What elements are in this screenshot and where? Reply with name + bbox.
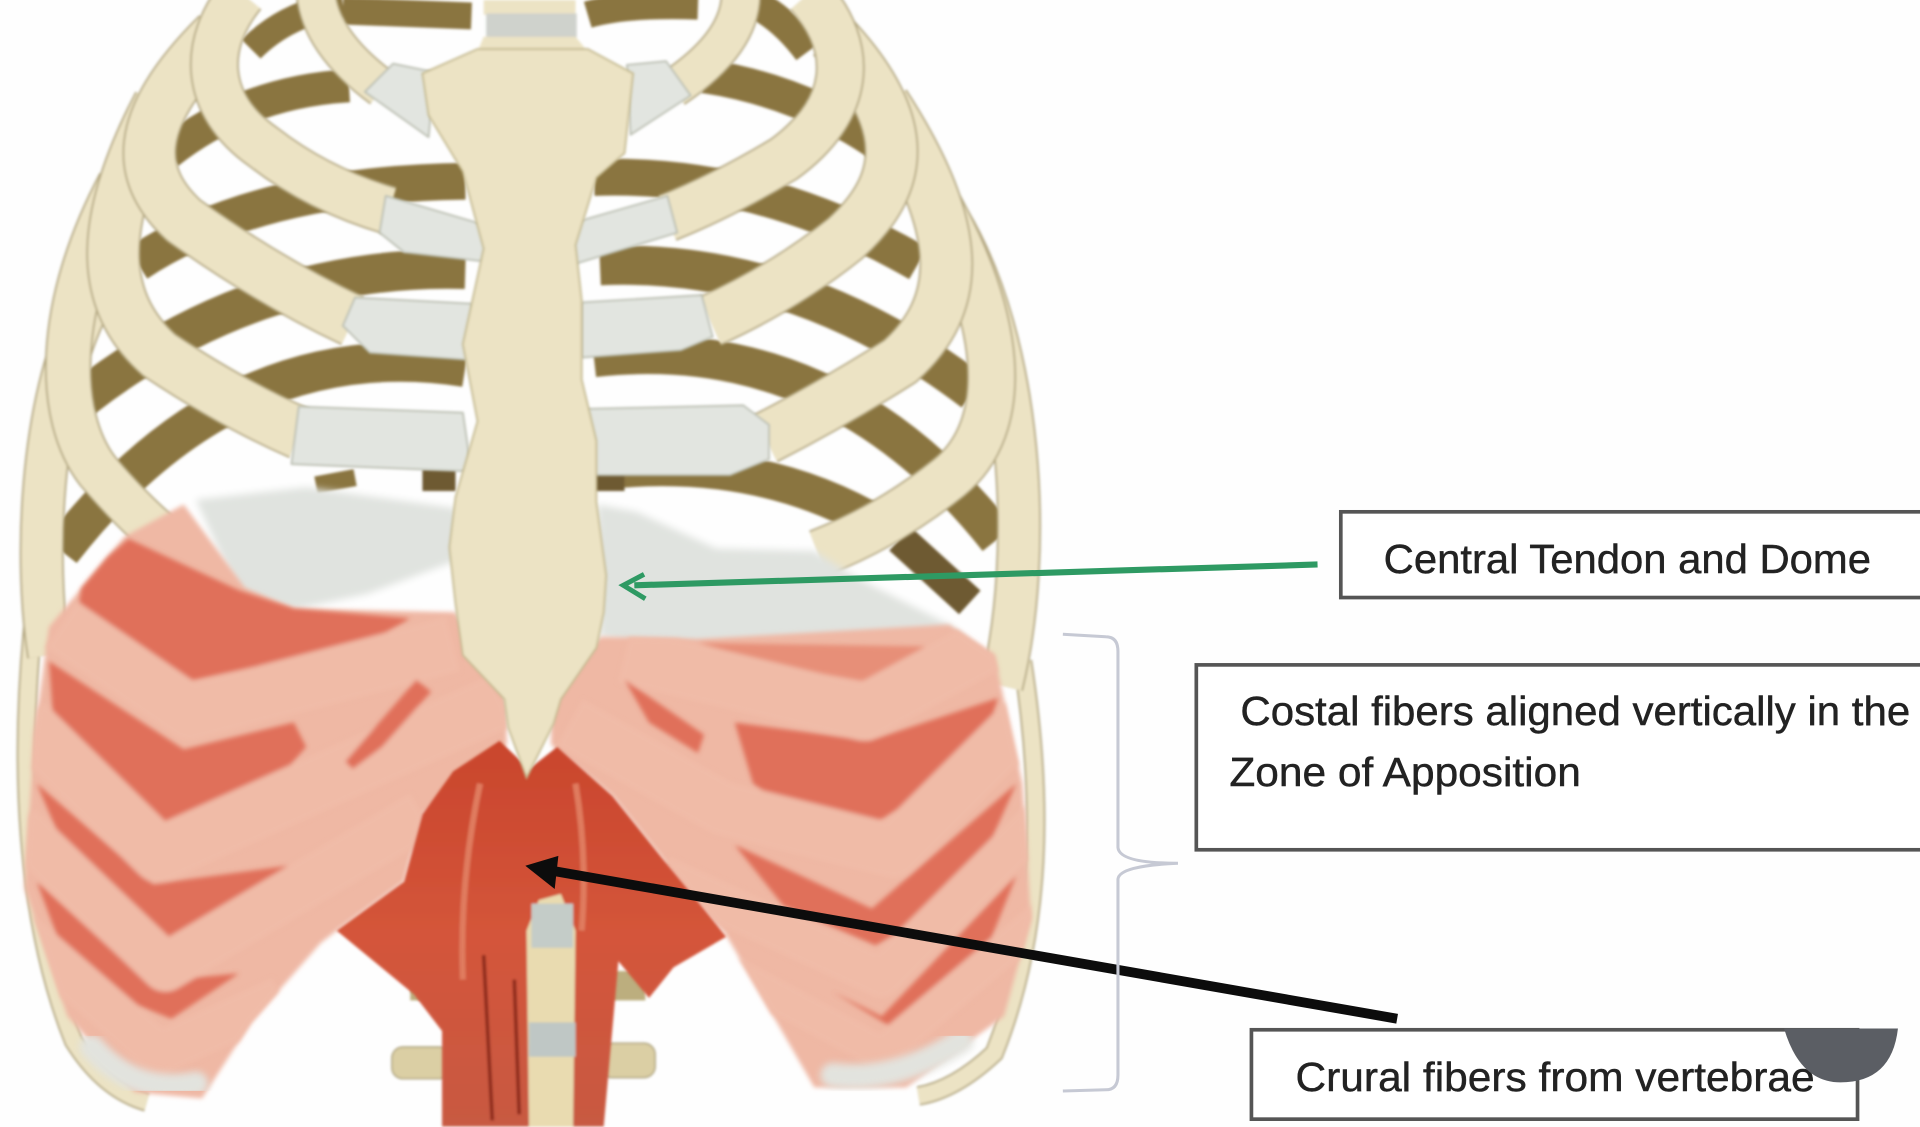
muscle fibres and bands (18, 539, 1041, 1053)
label: crural fibers (1251, 1030, 1858, 1119)
label: costal fibers (1196, 665, 1920, 850)
costal cartilages (291, 61, 769, 475)
label: central tendon (1341, 512, 1920, 598)
sternum (422, 0, 633, 778)
illustration: rib cage and diaphragm (18, 0, 1041, 1127)
arrow: black to crural fibers (525, 856, 1397, 1019)
costal muscle base (25, 504, 1031, 1098)
back ribs (61, 4, 998, 602)
vertebrae (392, 971, 655, 1079)
bracket: costal fibers span (1063, 634, 1178, 1091)
grey tips of the costal margin (92, 1041, 961, 1086)
crural fibres (337, 741, 726, 1127)
dark semicircle overlay (1784, 1029, 1898, 1082)
central tendon dome (196, 487, 992, 661)
label: central tendon: Central Tendon and Dome (1384, 536, 1871, 582)
label: costal fibers: Costal fibers aligned vertically in the (1240, 688, 1910, 734)
ribs, left and right (26, 0, 1036, 1102)
label: crural fibers: Crural fibers from vertebrae (1296, 1054, 1815, 1100)
label: costal fibers: Zone of Apposition (1229, 749, 1581, 795)
arrow: green to central tendon (623, 564, 1318, 599)
